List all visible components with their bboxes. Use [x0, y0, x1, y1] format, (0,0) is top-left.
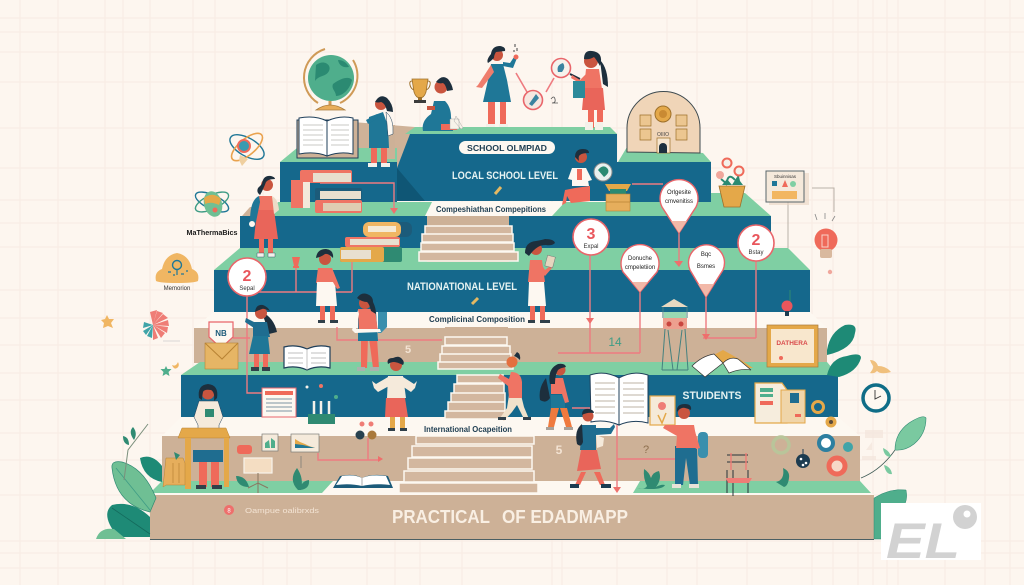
plant: left dark leaf: [107, 504, 150, 537]
icon: small leaf: [236, 476, 249, 487]
figure: kneeling girl: [423, 77, 463, 131]
icon: shield badge: NB: [215, 329, 227, 338]
icon: gold box: [605, 184, 631, 211]
icon: gear gold: [812, 402, 836, 428]
icon: tilted open book: [692, 350, 753, 377]
watermark: EL logo: [881, 503, 981, 569]
icon: atom middle: [193, 188, 231, 219]
label: campus caption: [224, 505, 320, 515]
icon: faint wall marks: [862, 430, 883, 460]
faint sign connector: [788, 188, 834, 248]
title: base tier: PRACTICAL: [392, 507, 490, 527]
heading: national level: NATIONATIONAL LEVEL: [407, 281, 517, 293]
title: base tier: OF EDADMAPP: [502, 507, 628, 527]
icon: small card: [650, 396, 675, 425]
numeral: five lower: 5: [556, 443, 563, 457]
chart: small area chart: [291, 434, 319, 452]
title: base tier: [392, 507, 628, 527]
icon: chair: [726, 453, 752, 496]
stairs: lowest flight: [399, 436, 538, 493]
icon: small picture: [262, 434, 278, 451]
icon: small goblet: [292, 257, 300, 268]
icon: open book top: [297, 117, 358, 158]
icon: wall gears cluster: [773, 436, 853, 474]
pin: 2 sepal: 2: [243, 268, 252, 285]
tier: base: [150, 481, 874, 540]
pin: donuche teardrop: [621, 245, 659, 292]
icon: red tag: [237, 445, 252, 454]
plant: left large leaf: [112, 462, 156, 512]
label: international competition: International Ocapeition: [424, 425, 512, 434]
icon: hanging bulb: [782, 290, 792, 316]
figure: reading girl: [525, 239, 555, 323]
numeral: question mark: ?: [643, 444, 649, 456]
tier: upper right block: [617, 147, 711, 202]
label: campus caption: Oampue oalibrxds: [245, 508, 320, 515]
tier: top central block: [353, 122, 617, 201]
figure: student with blue bag: [352, 294, 387, 371]
icon: test tubes: [306, 384, 338, 424]
icon: small moon: [172, 362, 179, 369]
figure: blue girl with pin: [245, 305, 277, 371]
figure: standing blue girl: [476, 44, 518, 127]
pin: 2 bstay: Bstay: [748, 250, 764, 256]
plant: left mid leaf: [140, 457, 162, 482]
pin: 3 expal: 3: [587, 226, 596, 243]
icon: small star orange: [101, 315, 114, 328]
plant: left ground leaf: [96, 529, 126, 539]
connector arrowheads: [378, 208, 710, 493]
icon: paper sheet: [262, 388, 296, 417]
tier: national level: [214, 248, 810, 312]
tier: upper left block: [280, 148, 397, 202]
tier: tan wall two: [162, 417, 860, 482]
icon: green bush: [637, 469, 665, 489]
pin: orange teardrop: cmvenitiss: [665, 199, 693, 205]
figure: child with open arms: [372, 357, 417, 431]
pin: 3 expal: Expal: [583, 244, 599, 250]
icon: green sprout: [293, 456, 309, 490]
figure: girl at table: [193, 384, 223, 489]
icon: light bulb: [814, 213, 838, 274]
icon: school table: [178, 428, 230, 489]
label: mathematics: MaThermaBics: [186, 228, 238, 237]
icon: globe: [304, 49, 357, 110]
tier: level six: [240, 193, 771, 249]
icon: trophy: [410, 79, 430, 103]
icon: paper clip lower: [472, 298, 478, 304]
icon: dark flowers: [356, 422, 376, 440]
numeral: fourteen: 14: [608, 335, 622, 349]
pin: 3 expal: [573, 219, 609, 255]
pin: 2 sepal: Sepal: [239, 286, 255, 292]
heading: students: STUIDENTS: [682, 390, 742, 402]
staircase pyramid: [150, 122, 874, 540]
stairs: upper flight: [419, 216, 518, 262]
figure: seated girl: [366, 96, 395, 167]
icon: paper clip upper: [495, 187, 501, 194]
icon: school building: OIIIO: [657, 132, 669, 138]
pin: orange teardrop: [660, 180, 698, 233]
icon: open book tier four: [284, 346, 330, 370]
plant: right lower leaf: [874, 490, 907, 539]
label: competition strip: [425, 202, 565, 216]
icon: wooden stool: [163, 452, 185, 487]
icon: book stack lower: [340, 222, 412, 262]
figure: red dress girl with folder: [571, 51, 608, 130]
icon: notice board: [766, 171, 809, 205]
pin: bqc teardrop: Bqc: [701, 252, 711, 258]
icon: book stack upper: [291, 170, 362, 213]
icon: small signboard: [244, 458, 272, 493]
stairs: third flight: [445, 375, 505, 419]
pin: bqc teardrop: Bsmes: [697, 264, 715, 270]
figure: girl with coral top and white skirt: [316, 249, 340, 323]
heading: local school level: LOCAL SCHOOL LEVEL: [452, 170, 558, 182]
icon: notice board: Sbuinnisas: [774, 174, 797, 179]
label: school olympiad: [459, 141, 555, 154]
icon: wall leaf: [776, 468, 789, 487]
icon: folder: [755, 383, 805, 423]
pin: 2 bstay: [738, 225, 774, 261]
figure: girl walking right: [540, 364, 573, 430]
stairs: second flight: [438, 327, 513, 369]
icon: big open book: [590, 373, 648, 425]
icon: school building: [627, 92, 700, 153]
figure: boy with backpack: [663, 404, 708, 488]
icon: open book ground: [333, 475, 393, 488]
label: memorion: Memorion: [164, 286, 190, 292]
connector lines: [233, 183, 756, 487]
icon: linked magnifier circles: [516, 58, 580, 110]
label: competition strip: Compeshiathan Compepitions: [436, 205, 547, 214]
icon: certificate: [767, 325, 818, 367]
figure: girl with blue jacket: [249, 176, 279, 257]
icon: clock: [863, 385, 889, 411]
pin: donuche teardrop: cmpeletiion: [625, 265, 655, 271]
pin: orange teardrop: Orlgesite: [667, 190, 692, 196]
icon: lookout tower: [661, 299, 688, 370]
figure: walker on stairs: [498, 352, 531, 421]
pin: 2 sepal: [228, 258, 266, 296]
label: campus caption: 8: [227, 508, 231, 514]
pin: donuche teardrop: Donuche: [628, 256, 653, 262]
label: international competition: [416, 423, 515, 436]
plant: right leaves tier: [827, 325, 861, 377]
plant: sapling: [123, 424, 148, 480]
figure: girl walking with skirt: [570, 409, 615, 488]
pin: bqc teardrop: [688, 245, 724, 297]
pin: 2 bstay: 2: [752, 232, 761, 249]
icon: memory cloud: [156, 253, 198, 283]
icon: flower pot: [716, 158, 745, 207]
plant: right upper leaf: [861, 417, 926, 478]
icon: envelope: [205, 343, 238, 369]
label: compilation competition: Complicinal Composition: [429, 315, 525, 324]
watermark: EL logo: EL: [886, 513, 960, 569]
tier: students: [181, 362, 838, 417]
label: school olympiad: SCHOOL OLMPIAD: [467, 143, 547, 153]
icon: certificate: DATHERA: [776, 340, 808, 347]
tier: tan wall four: [194, 312, 827, 363]
numeral: five upper: 5: [405, 344, 411, 356]
figure: kneeling student with globe: [562, 149, 612, 205]
icon: atom top: [226, 129, 268, 166]
icon: shield badge: [209, 322, 233, 348]
icon: orange fan: [870, 360, 891, 373]
icon: small star green: [160, 366, 172, 376]
icon: paper flower: [143, 310, 180, 341]
